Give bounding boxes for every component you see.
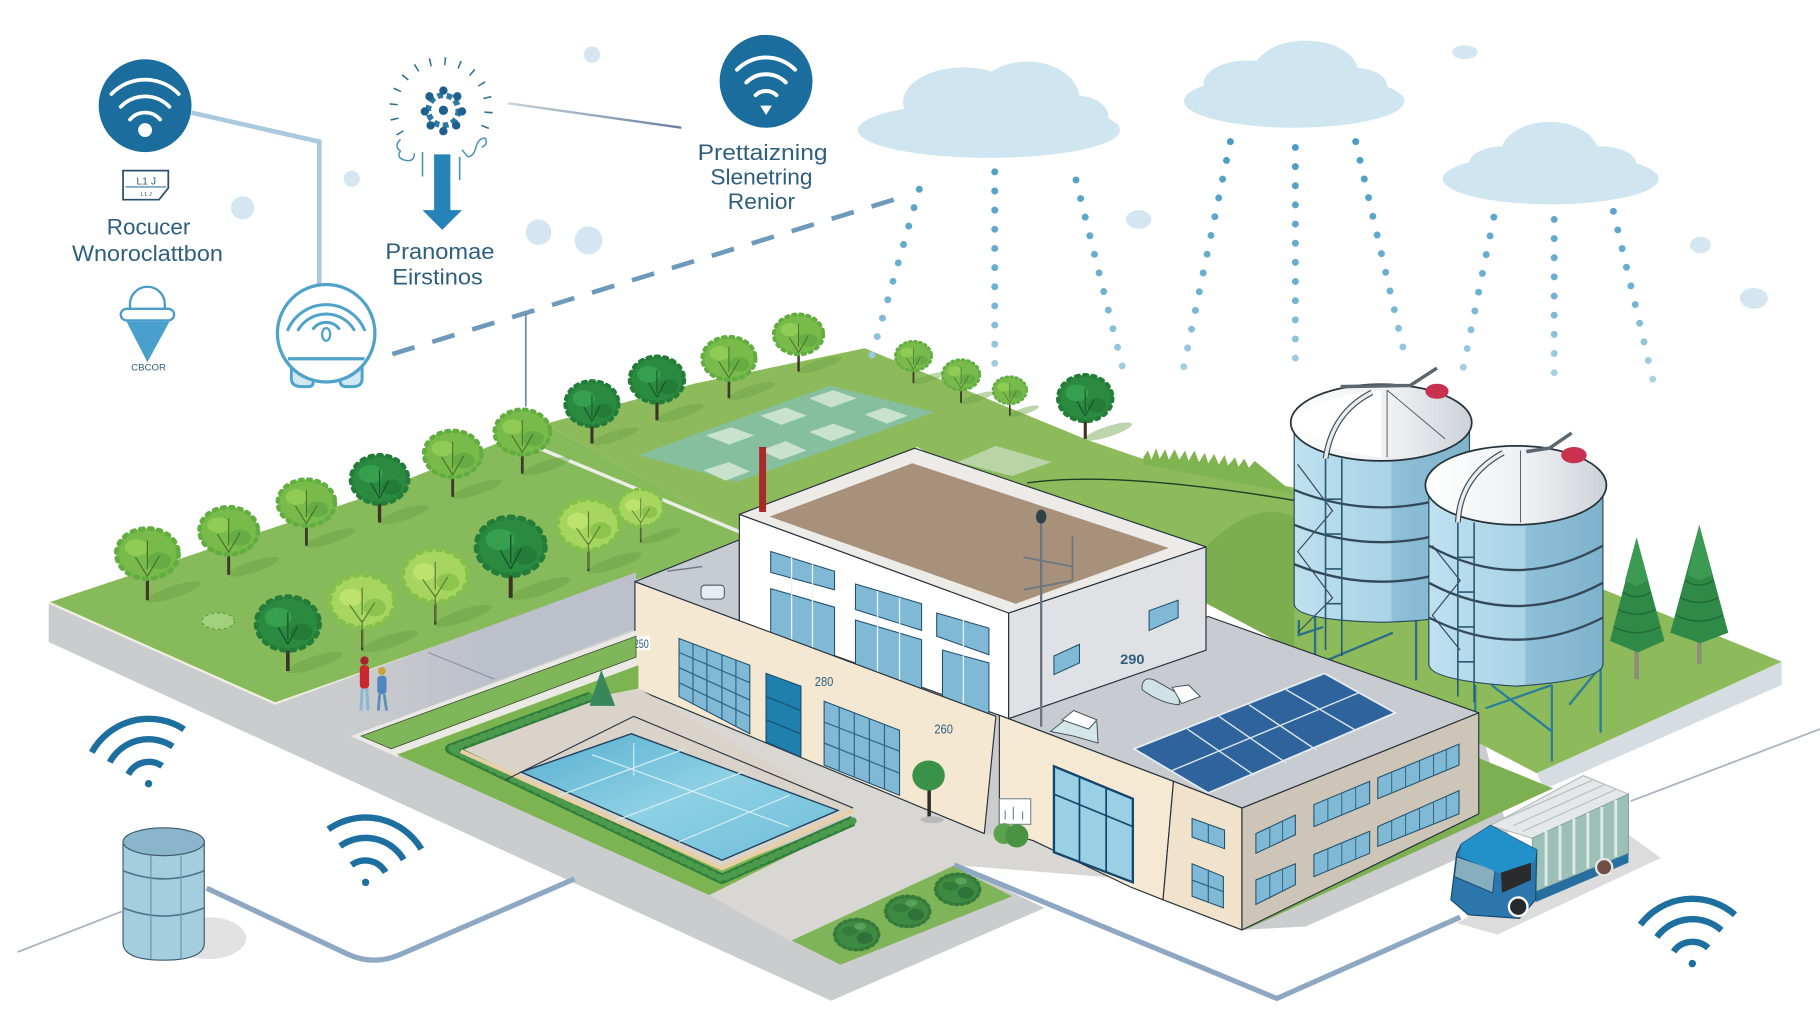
building numbers: 260 — [934, 722, 953, 737]
front lawn with bushes — [792, 866, 1012, 965]
wifi symbols on the ground — [87, 709, 1740, 972]
storage cylinder — [123, 828, 246, 960]
conifer trees — [1610, 525, 1728, 679]
people — [360, 656, 387, 711]
icon: wifi badge left — [99, 59, 192, 152]
silo tank 1 — [1291, 368, 1472, 680]
small conifer by the lawn — [590, 670, 615, 706]
small courtyard tree — [912, 760, 945, 823]
lawn edge trim — [49, 577, 635, 704]
icon: small card: L1 J — [141, 192, 152, 198]
upper block roof — [739, 448, 1206, 613]
right face windows — [1256, 744, 1459, 904]
upper block grey side — [1009, 547, 1206, 719]
pale floating droplets — [231, 45, 1768, 309]
green pad with pale tiles — [638, 385, 1052, 482]
text: centre label — [385, 239, 494, 289]
icon: small card: L1 J — [136, 177, 156, 188]
icon: small card — [123, 171, 168, 200]
icon: wifi badge top — [720, 35, 812, 128]
roof equipment left — [667, 567, 724, 599]
text: left label: Rocucer — [107, 215, 190, 240]
thin connector — [508, 103, 681, 128]
back lawn and hill — [546, 348, 1782, 930]
road — [275, 572, 636, 736]
beige wall left — [635, 582, 996, 834]
wing right face — [1242, 713, 1479, 930]
brown roof surface — [770, 463, 1169, 604]
icon: down arrow — [422, 154, 462, 230]
text: right label: Renior — [728, 189, 795, 214]
connector line from wifi badge to sensor — [192, 113, 319, 286]
text: right label: Prettaizning — [698, 140, 828, 165]
text: right label — [698, 140, 828, 214]
delivery truck — [1451, 776, 1661, 935]
dashed signal link — [392, 200, 894, 354]
building numbers: 290 — [1120, 651, 1145, 667]
icon: funnel sensor: CBCOR — [131, 362, 166, 372]
rooftop equipment — [1050, 679, 1200, 743]
text: right label: Slenetring — [710, 165, 812, 190]
text: centre label: Eirstinos — [392, 264, 483, 289]
trees — [116, 314, 1134, 677]
upper block white face — [739, 514, 1009, 719]
beige wall centre — [999, 715, 1173, 900]
silo tank 2 — [1425, 433, 1606, 762]
left lawn — [49, 424, 743, 704]
text: left label — [72, 215, 223, 266]
main building — [634, 447, 1479, 930]
sign and shrub — [994, 799, 1031, 848]
building numbers: 250 — [634, 638, 649, 651]
wing corner — [1163, 781, 1242, 930]
pole from link to lawn — [525, 313, 527, 406]
upper windows — [771, 551, 1178, 716]
lower left wing roof — [635, 540, 739, 621]
icon: wifi sensor device — [277, 284, 375, 387]
connecting lines along the ground — [17, 729, 1820, 998]
building numbers: 280 — [815, 674, 833, 689]
rain — [871, 142, 1656, 395]
right wing terrace roof — [999, 616, 1479, 808]
red chimney — [759, 447, 766, 512]
swimming pool — [450, 688, 853, 879]
beige windows — [679, 639, 1225, 908]
building numbers — [634, 636, 1145, 737]
text: centre label: Pranomae — [385, 239, 494, 264]
icon: funnel sensor — [121, 287, 174, 372]
lawn path — [536, 447, 739, 532]
solar panel — [1134, 673, 1395, 793]
clouds — [858, 41, 1659, 204]
text: left label: Wnoroclattbon — [72, 241, 223, 266]
icon: processing cluster — [393, 61, 489, 180]
ground: grey paved base — [49, 546, 1509, 1001]
antenna mast — [1024, 510, 1072, 727]
lawn strips by the road — [351, 630, 854, 895]
